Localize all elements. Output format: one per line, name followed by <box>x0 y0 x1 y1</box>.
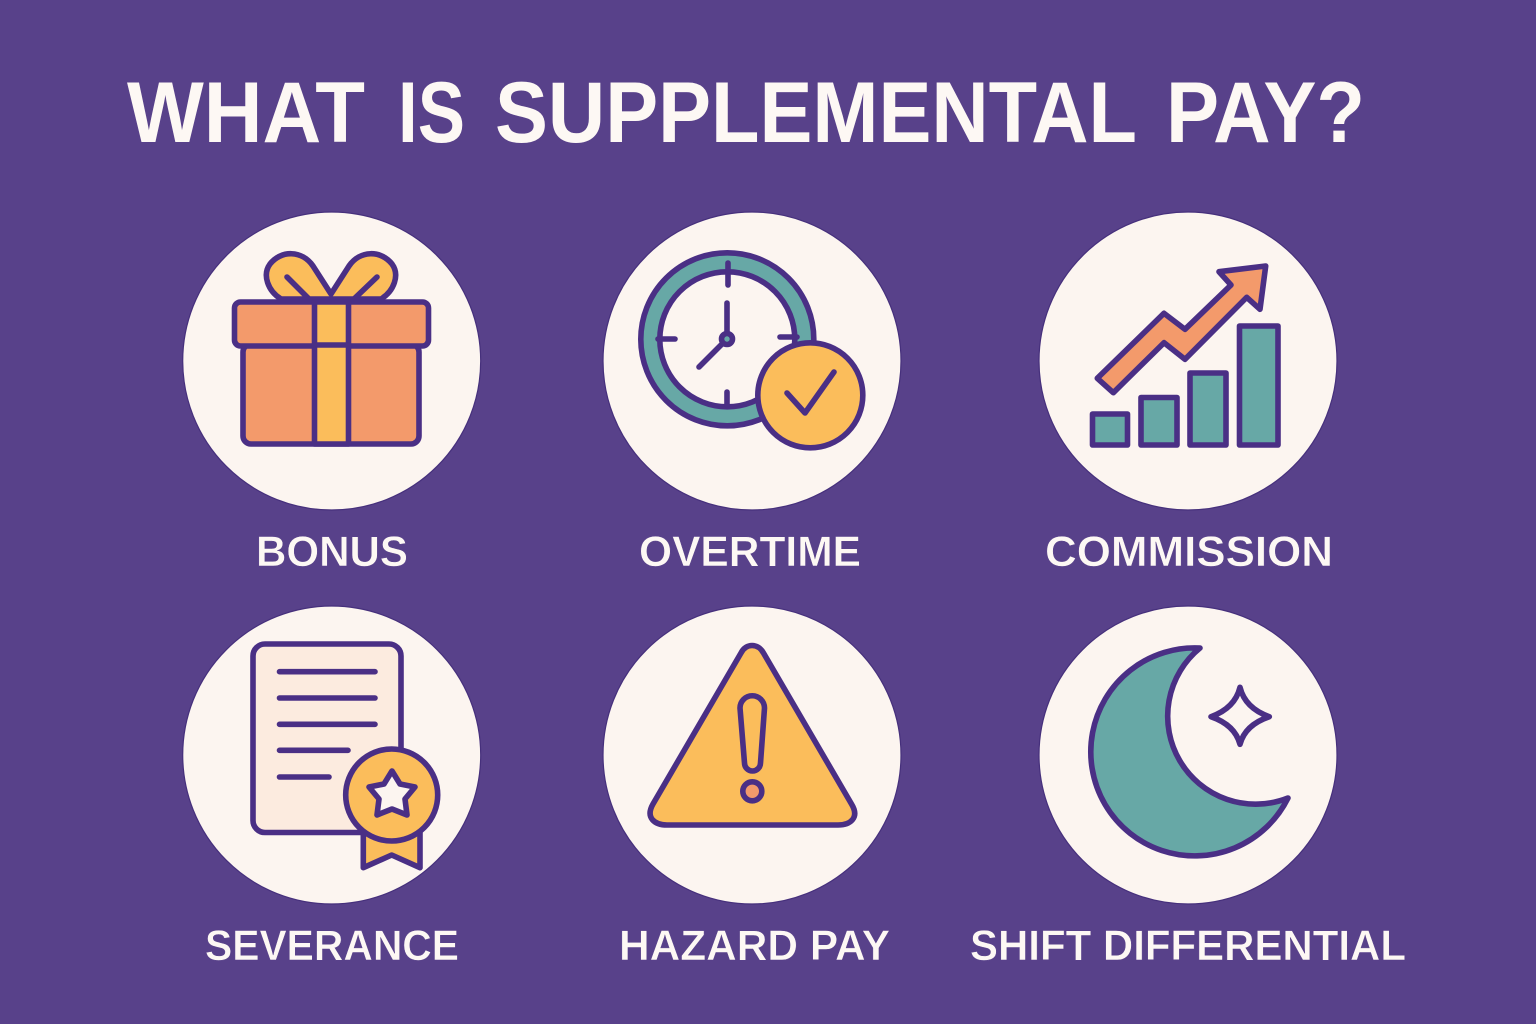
panel: commission <box>1039 212 1337 576</box>
title: WHAT <box>127 65 365 161</box>
icon circle: bonus <box>183 212 481 510</box>
label: bonus: BONUS <box>256 528 408 576</box>
icon: rising bar chart with arrow <box>1092 266 1278 445</box>
label: shift differential: SHIFT DIFFERENTIAL <box>970 922 1406 970</box>
icon: clock with check badge <box>641 253 863 448</box>
panel: hazard pay <box>603 606 901 970</box>
icon circle: overtime <box>603 212 901 510</box>
panel: severance <box>183 606 481 970</box>
icon circle: shift differential <box>1039 606 1337 904</box>
label: severance: SEVERANCE <box>205 922 459 970</box>
label: commission: COMMISSION <box>1045 528 1333 576</box>
icon: warning triangle <box>650 646 855 825</box>
icon circle: commission <box>1039 212 1337 510</box>
label: overtime: OVERTIME <box>639 528 861 576</box>
panel: shift differential <box>970 606 1406 970</box>
title: SUPPLEMENTAL <box>495 65 1137 161</box>
title <box>127 65 1365 161</box>
panel: overtime <box>603 212 901 576</box>
icon: document with award seal <box>253 644 438 868</box>
panel: bonus <box>183 212 481 576</box>
title: IS <box>398 65 465 161</box>
label: hazard pay: HAZARD PAY <box>619 922 890 970</box>
icon: gift box <box>234 254 428 444</box>
icon circle: hazard pay <box>603 606 901 904</box>
icon: crescent moon and star <box>1091 648 1288 856</box>
icon circle: severance <box>183 606 481 904</box>
title: PAY? <box>1166 65 1365 161</box>
